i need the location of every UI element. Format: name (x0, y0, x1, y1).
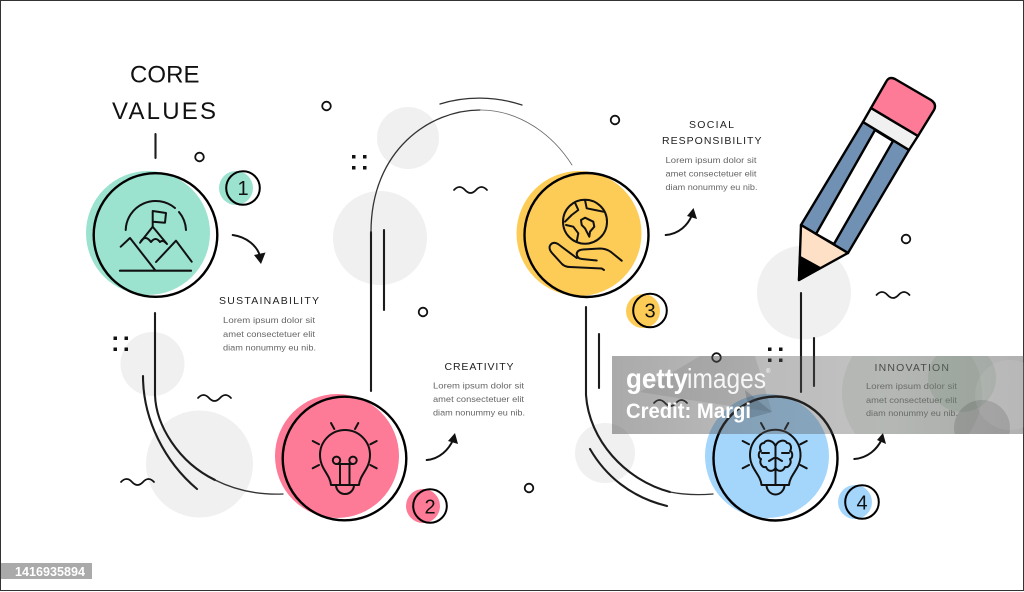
blue disc and ring (705, 394, 838, 520)
wood tip (799, 225, 848, 280)
heading and body text: diam nonummy eu nib. (433, 408, 525, 418)
heading and body text: diam nonummy eu nib. (866, 408, 958, 418)
heading and body text: amet consectetuer elit (223, 329, 316, 339)
number badge 4 (838, 485, 879, 519)
arrow (233, 235, 266, 264)
small ring decorations (195, 102, 910, 492)
heading and body text: SOCIAL (689, 119, 734, 131)
heading and body text (219, 295, 319, 352)
heading and body text: CREATIVITY (444, 361, 514, 373)
number badge 1: 1 (237, 178, 249, 200)
number badge 3 (626, 294, 667, 328)
title: CORE (130, 62, 200, 88)
number badge 2 (406, 489, 447, 523)
number badge 4: 4 (856, 492, 868, 514)
ferrule (863, 108, 918, 150)
wavy decorations (121, 187, 910, 485)
dot clusters (114, 155, 782, 362)
panel: step 4 innovation (705, 362, 958, 520)
teal disc and ring (86, 171, 217, 297)
title (112, 62, 216, 125)
watermark logo text: images (687, 363, 766, 394)
panel: step 3 social responsibility (516, 119, 762, 328)
image id stamp: 1416935894 (15, 565, 85, 579)
white centre stripe (816, 130, 893, 244)
pink disc and ring (275, 394, 406, 520)
heading and body text (662, 119, 762, 192)
title: VALUES (112, 98, 216, 125)
icon: light bulb (313, 423, 377, 494)
arrow (854, 433, 886, 459)
background grey circles (120, 107, 851, 518)
panel: step 1 sustainability (86, 171, 319, 352)
heading and body text: diam nonummy eu nib. (666, 182, 758, 192)
number badge 3: 3 (644, 300, 656, 322)
heading and body text: Lorem ipsum dolor sit (666, 155, 757, 165)
watermark logo text: ® (766, 368, 771, 375)
panel: step 2 creativity (275, 361, 525, 523)
icon: mountain with flag (120, 201, 192, 271)
heading and body text: INNOVATION (874, 362, 949, 374)
pencil body (801, 122, 909, 253)
graphite point (799, 257, 820, 280)
watermark band (612, 356, 1024, 434)
icon: brain in bulb (743, 423, 807, 494)
number badge 2: 2 (424, 496, 436, 518)
heading and body text: Lorem ipsum dolor sit (866, 381, 958, 391)
watermark logo text: Credit: Margi (626, 400, 751, 423)
heading and body text (433, 361, 525, 418)
heading and body text: SUSTAINABILITY (219, 295, 319, 307)
eraser (871, 78, 935, 136)
heading and body text: amet consectetuer elit (666, 168, 757, 178)
heading and body text: RESPONSIBILITY (662, 135, 762, 147)
arrow (666, 208, 697, 235)
heading and body text (866, 362, 958, 418)
number badge 1 (219, 171, 260, 205)
heading and body text: Lorem ipsum dolor sit (223, 315, 316, 325)
heading and body text: diam nonummy eu nib. (223, 342, 316, 352)
heading and body text: Lorem ipsum dolor sit (433, 380, 525, 390)
pencil illustration (799, 78, 935, 280)
yellow disc and ring (516, 171, 648, 297)
icon: hand holding globe (550, 200, 622, 270)
image id stamp (1, 563, 92, 579)
watermark logo text (626, 363, 771, 423)
watermark logo text: getty (626, 363, 688, 394)
arrow (427, 433, 458, 460)
connecting path lines (143, 98, 814, 506)
heading and body text: amet consectetuer elit (433, 394, 525, 404)
heading and body text: amet consectetuer elit (866, 395, 958, 405)
